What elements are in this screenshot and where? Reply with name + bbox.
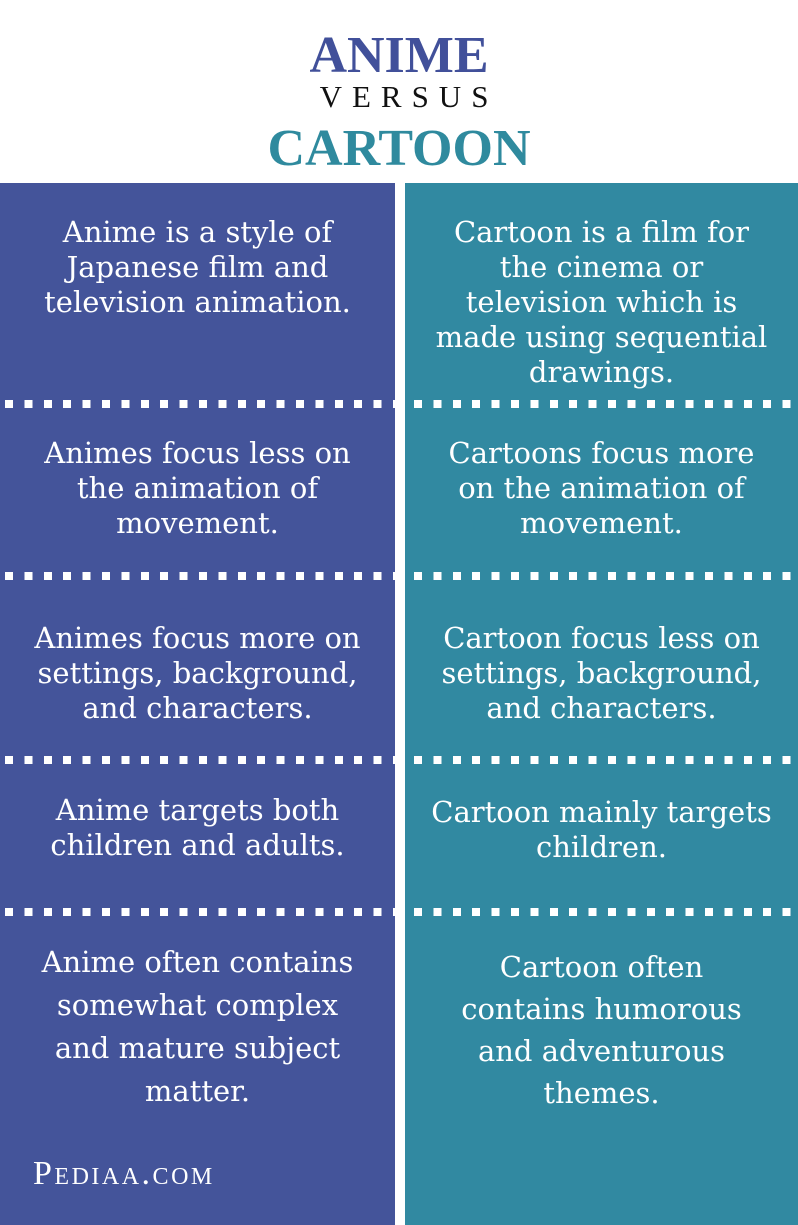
- text: anime definition: Anime is a style of: [63, 215, 332, 249]
- heading: anime: ANIME: [309, 27, 489, 84]
- text: anime themes: matter.: [145, 1074, 250, 1108]
- title: [267, 27, 531, 177]
- text: cartoon settings: and characters.: [486, 691, 717, 725]
- text: cartoon movement: [449, 436, 754, 540]
- logo: pediaa.com: Pediaa.com: [33, 1155, 215, 1192]
- text: anime movement: movement.: [116, 506, 279, 540]
- text: anime settings: settings, background,: [38, 656, 357, 690]
- text: anime audience: Anime targets both: [56, 793, 339, 827]
- text: anime definition: television animation.: [44, 285, 351, 319]
- text: cartoon settings: settings, background,: [442, 656, 761, 690]
- text: anime themes: somewhat complex: [57, 988, 338, 1022]
- panel: cartoon column: [405, 183, 798, 1225]
- text: anime movement: Animes focus less on: [44, 436, 351, 470]
- text: cartoon definition: made using sequential: [436, 320, 767, 354]
- text: cartoon audience: [431, 795, 772, 864]
- text: anime themes: and mature subject: [55, 1031, 340, 1065]
- text: cartoon themes: [461, 950, 742, 1110]
- text: cartoon themes: and adventurous: [478, 1034, 725, 1068]
- panel: anime column: [0, 183, 395, 1225]
- text: cartoon themes: themes.: [543, 1076, 660, 1110]
- text: anime settings: Animes focus more on: [34, 621, 361, 655]
- text: cartoon movement: Cartoons focus more: [449, 436, 754, 470]
- text: cartoon definition: television which is: [466, 285, 737, 319]
- text: cartoon themes: Cartoon often: [500, 950, 703, 984]
- text: cartoon themes: contains humorous: [461, 992, 742, 1026]
- text: cartoon audience: Cartoon mainly targets: [431, 795, 772, 829]
- text: anime definition: [44, 215, 351, 319]
- heading: versus: VERSUS: [320, 79, 498, 114]
- heading: cartoon: CARTOON: [267, 120, 531, 177]
- text: cartoon movement: on the animation of: [458, 471, 745, 505]
- text: cartoon definition: the cinema or: [500, 250, 703, 284]
- text: cartoon settings: [442, 621, 761, 725]
- text: anime movement: the animation of: [77, 471, 318, 505]
- text: anime definition: Japanese film and: [67, 250, 328, 284]
- text: anime themes: Anime often contains: [42, 945, 353, 979]
- text: anime audience: children and adults.: [50, 828, 345, 862]
- text: anime themes: [41, 945, 353, 1108]
- text: cartoon definition: drawings.: [529, 355, 674, 389]
- text: anime audience: [50, 793, 345, 862]
- text: cartoon movement: movement.: [520, 506, 683, 540]
- text: anime movement: [44, 436, 351, 540]
- text: cartoon settings: Cartoon focus less on: [443, 621, 760, 655]
- text: anime settings: and characters.: [82, 691, 313, 725]
- text: cartoon audience: children.: [536, 830, 667, 864]
- text: anime settings: [34, 621, 361, 725]
- text: cartoon definition: Cartoon is a film for: [454, 215, 749, 249]
- text: cartoon definition: [436, 215, 767, 389]
